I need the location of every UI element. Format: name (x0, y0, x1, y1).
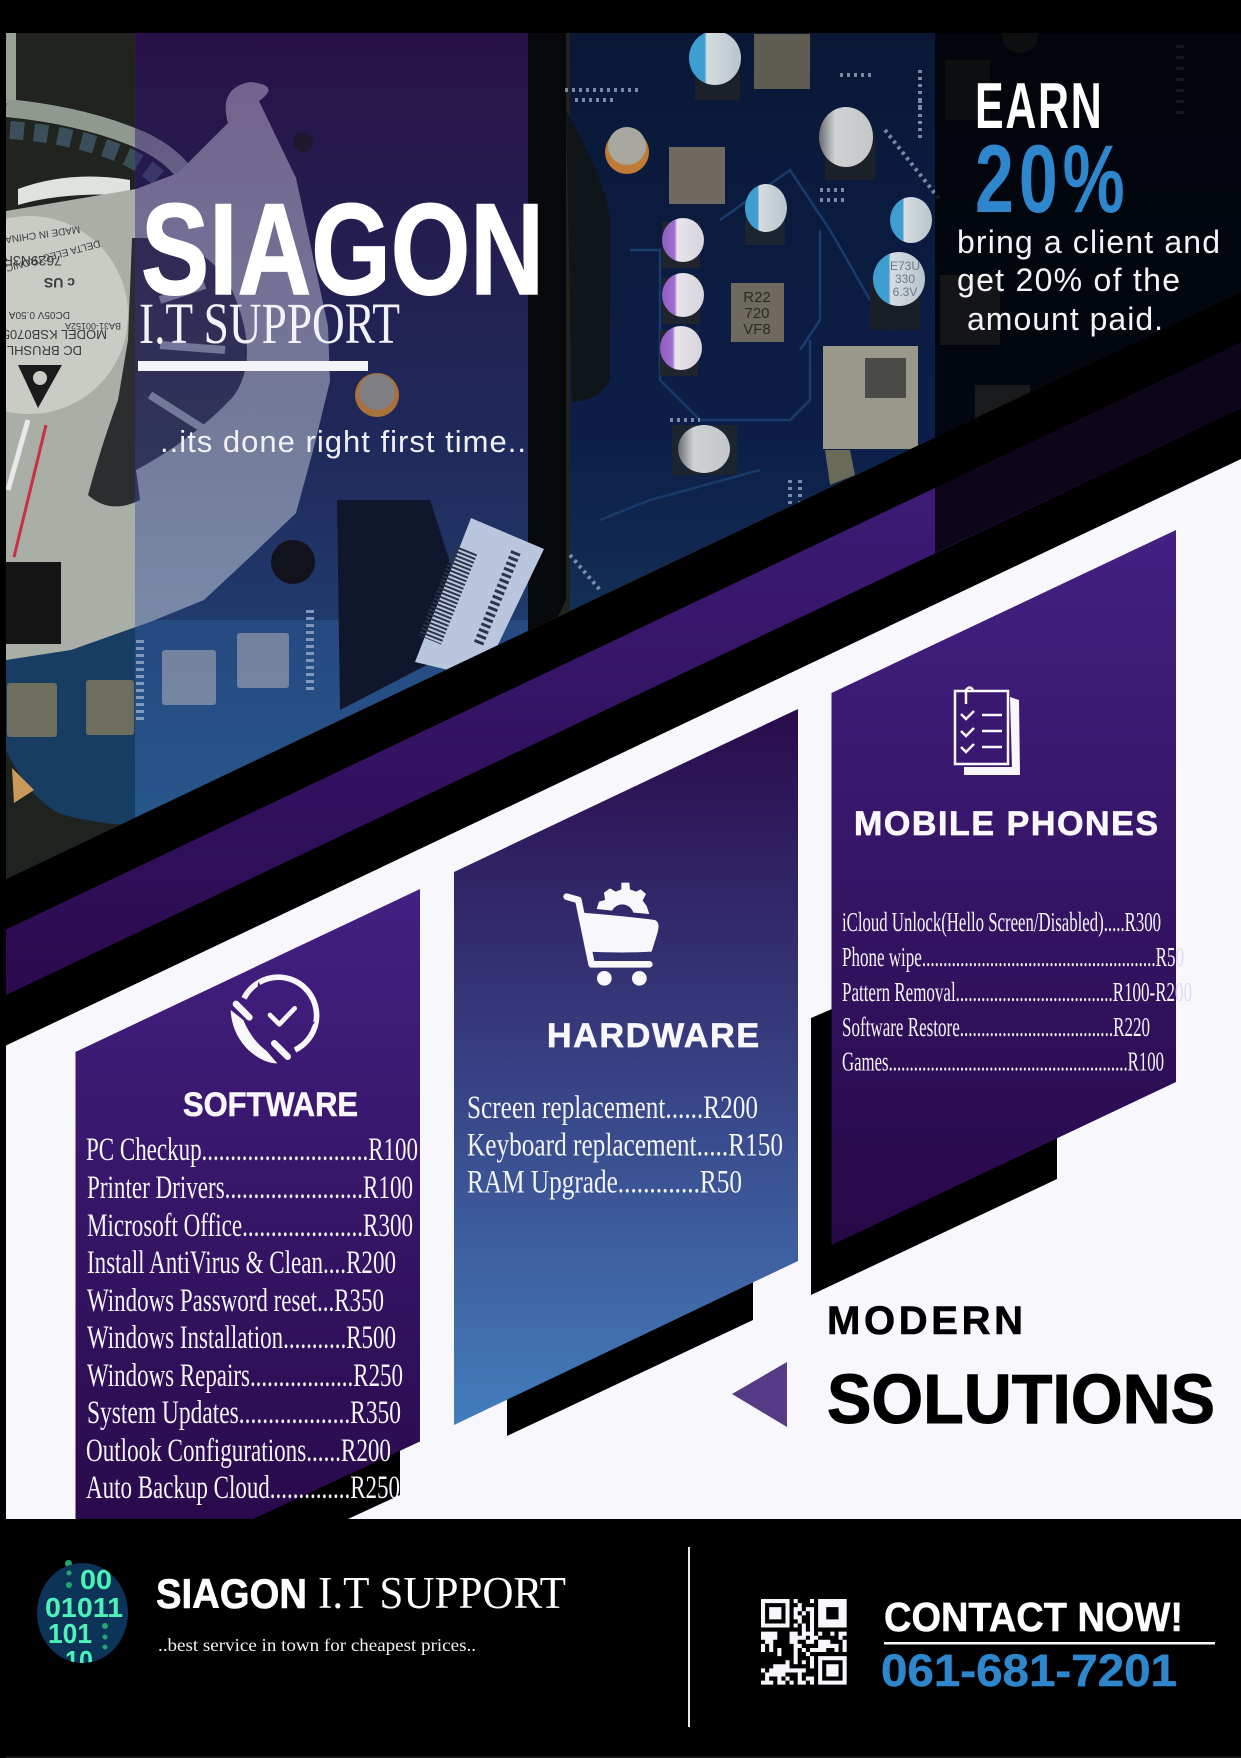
promotion text (957, 224, 1220, 337)
chips (7, 683, 57, 737)
icon: left-pointing triangle (732, 1362, 787, 1427)
title: SIAGON: SIAGON (141, 176, 544, 322)
panel shadow (507, 1282, 753, 1436)
panel shape (832, 530, 1176, 1245)
diagonal stripe: purple (6, 342, 1241, 995)
left black edge (0, 0, 6, 1758)
dark shape, screws inside band (337, 500, 452, 710)
promotion text: amount paid. (967, 301, 1163, 337)
panel shape (454, 709, 798, 1425)
heat pipe (528, 33, 566, 680)
footer divider (688, 1547, 690, 1727)
heading: SOLUTIONS: SOLUTIONS (827, 1360, 1215, 1438)
price list: software: Windows Repairs..................R250 (87, 1358, 403, 1394)
capacitors and inductors: 720 (744, 305, 770, 322)
heading: SOFTWARE: SOFTWARE (183, 1086, 358, 1124)
panel shadow (250, 1450, 400, 1519)
board traces (600, 170, 870, 520)
icon: binary logo: 101 (48, 1618, 92, 1649)
capacitors and inductors: 330 (895, 272, 915, 286)
icon: binary logo: 10 (65, 1645, 93, 1676)
subtitle: I.T SUPPORT: I.T SUPPORT (139, 291, 400, 356)
bottom edge line (6, 1756, 1241, 1758)
phone number: 061-681-7201 (881, 1645, 1177, 1696)
panel: hardware (454, 709, 798, 1436)
price list: software: Install AntiVirus & Clean....R200 (87, 1245, 396, 1281)
top black bar (0, 0, 1241, 33)
price list: software: Windows Password reset...R350 (87, 1283, 384, 1319)
promotion text: get 20% of the (957, 262, 1180, 298)
purple overlay band (135, 33, 528, 893)
price list: software (86, 1132, 418, 1506)
underline bar (138, 361, 368, 371)
heading: EARN: EARN (975, 69, 1102, 142)
capacitors and inductors: R22 (743, 289, 771, 306)
footer background (0, 1519, 1241, 1758)
price list: mobile phones (842, 907, 1192, 1076)
icon: binary logo: 00 (80, 1564, 112, 1595)
fan vent crescent (88, 238, 247, 506)
price list: hardware: Keyboard replacement.....R150 (467, 1128, 783, 1164)
footer brand: I.T SUPPORT: I.T SUPPORT (318, 1568, 566, 1618)
earn promotion block (957, 69, 1220, 337)
price list: software: Windows Installation...........R500 (87, 1320, 396, 1356)
capacitors and inductors: VF8 (743, 321, 771, 338)
brand title block (138, 176, 544, 459)
heading: MODERN: MODERN (827, 1299, 1023, 1343)
icon: binary logo (37, 1560, 128, 1663)
top photo: circuit board and fan (0, 17, 1241, 900)
heading: MOBILE PHONES: MOBILE PHONES (854, 805, 1158, 843)
promotion text: bring a client and (957, 224, 1220, 260)
capacitors and inductors (605, 31, 932, 485)
QR code (761, 1601, 847, 1683)
capacitors and inductors: 6.3V (893, 285, 917, 299)
price list: software: System Updates...................R350 (87, 1395, 401, 1431)
price list: software: PC Checkup.............................R100 (86, 1132, 418, 1168)
price list: software: Outlook Configurations......R200 (86, 1433, 391, 1469)
heading: CONTACT NOW!: CONTACT NOW! (884, 1594, 1183, 1640)
panel shadow (811, 1009, 1057, 1295)
panel: software (76, 889, 420, 1519)
capacitors and inductors: E73U (890, 259, 920, 273)
top photo: circuit board and fan: MODEL KSB0705 (3, 327, 107, 342)
dark block details on the right (945, 60, 990, 120)
dark overlay on right of photo (935, 33, 1241, 553)
top photo: circuit board and fan: DC05V 0.50A (9, 309, 70, 320)
diagonal stripe: black (6, 292, 1241, 1046)
barcode label (415, 518, 544, 678)
top photo: circuit board and fan: c US (44, 275, 75, 291)
heading: HARDWARE: HARDWARE (547, 1017, 759, 1055)
top photo: circuit board and fan: MADE IN CHINA (4, 223, 81, 245)
price list: hardware: RAM Upgrade.............R50 (467, 1164, 742, 1200)
footer tagline: ..best service in town for cheapest prices.. (158, 1635, 476, 1655)
fan plate (6, 82, 330, 660)
contact underline (884, 1642, 1215, 1644)
price list: software: Printer Drivers........................R100 (87, 1170, 413, 1206)
top photo: circuit board and fan: 7629N3R (3, 253, 62, 269)
fan hub label (0, 216, 128, 414)
price list: software: Auto Backup Cloud..............R250 (86, 1470, 400, 1506)
panel shape (76, 889, 420, 1519)
price list: software: Microsoft Office.....................R300 (87, 1208, 413, 1244)
top photo: circuit board and fan: BA31-00152A (65, 321, 121, 331)
footer brand: SIAGON: SIAGON (156, 1570, 307, 1617)
price list: hardware (467, 1090, 783, 1200)
footer (0, 1519, 1241, 1758)
icon: shopping cart with gear (567, 883, 659, 986)
price list: hardware: Screen replacement......R200 (467, 1090, 758, 1126)
top photo: circuit board and fan: DELTA ELECTRONICS (0, 237, 101, 275)
icon: phone with clock and check (231, 977, 317, 1063)
panel: mobile phones (811, 530, 1192, 1295)
modern solutions heading (732, 1299, 1215, 1438)
figure: 20%: 20% (975, 124, 1125, 233)
icon: binary logo: 01011 (45, 1592, 123, 1623)
icon: checklist document (955, 688, 1020, 775)
tagline: ..its done right first time.. (160, 424, 526, 459)
